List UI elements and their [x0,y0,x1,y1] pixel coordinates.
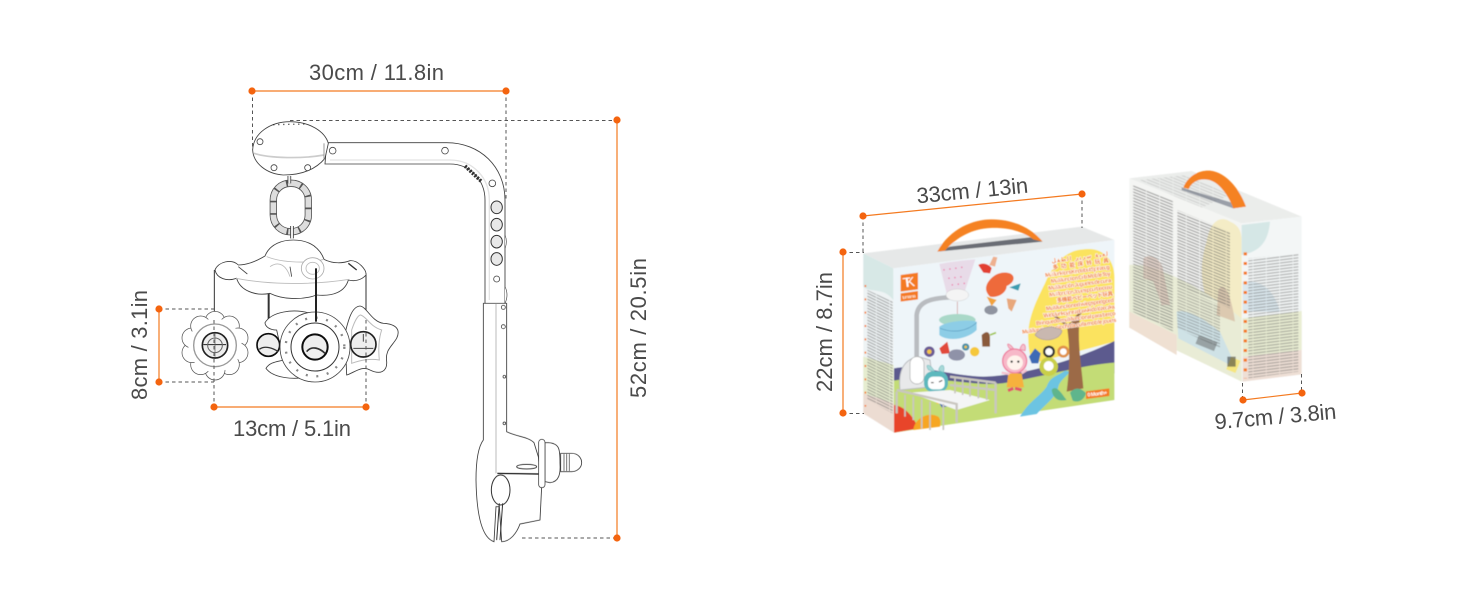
projected animals [978,257,1021,315]
front label text: 多功能床铃玩具 [1052,256,1110,271]
dimension: total height 52cm: 52cm / 20.5in [626,258,651,398]
box front view [863,219,1118,433]
front label text: Multifonction Jouets pour berceau [1049,285,1113,299]
back box narrow side [1242,217,1302,382]
hanging toys [924,332,996,361]
tree [1052,310,1086,402]
box back view [1129,171,1302,382]
mobile product line drawing [182,122,582,542]
front label text: 多機能ベビーベッド玩具 [1056,289,1114,304]
flower toy [182,311,248,380]
canopy [215,240,366,299]
age badge: 0 Month+ [1087,390,1108,399]
dimension: box height 22cm [812,248,864,417]
dimension: toy span 13cm: 13cm / 5.1in [233,416,351,441]
box left side [863,253,894,433]
round disc toy [280,268,350,382]
back box wide face [1129,178,1243,382]
arm and pole [325,143,507,304]
box top face [863,227,1114,268]
illustrated mobile [900,259,977,390]
front label text: Wielofunkcyjne zabawki do łóżeczka [1043,304,1116,320]
dimension: toy height 8cm [127,290,214,400]
star toy [345,306,398,375]
front label text: لعبة سرير الطفل [1051,251,1109,265]
front label text: Multifunctioneel wiegspeelgoed [1046,298,1115,313]
front label text: Multifunción Juguetes de cuna [1048,278,1113,292]
brand badge: tumama [902,293,916,300]
brand badge: TK [902,274,916,290]
moon and small ball toy [257,311,310,378]
dimension: box height 22cm: 22cm / 8.7in [812,272,837,392]
age badge [1086,388,1109,399]
back box top face [1129,171,1302,223]
strings [214,270,366,323]
front label text [1013,250,1118,336]
dimension: box length 33cm: 33cm / 13in [915,173,1029,208]
dimension: arm width 30cm [248,60,510,200]
chain link [273,176,308,238]
dimension: toy span 13cm [210,320,370,441]
dimension: box depth 9.7cm [1213,374,1337,434]
speaker hub [253,122,328,175]
back box handle [1183,171,1246,208]
front label text: Multifunction Crib Mobile Toy [1051,271,1112,285]
dimension: box depth 9.7cm: 9.7cm / 3.8in [1213,399,1337,434]
dimension: toy height 8cm: 8cm / 3.1in [127,290,152,400]
clamp [476,303,582,542]
box front illustration [893,240,1114,433]
front label text: Brinquedo multifuncional para berço [1036,311,1117,327]
brand badge [901,273,918,302]
dimension: box length 33cm [859,173,1086,254]
orange handle [937,219,1043,252]
dimension: total height 52cm [290,116,651,542]
dimension: arm width 30cm: 30cm / 11.8in [309,60,444,85]
front label text: Multifunktions Kinderbett Spielzeug [1045,265,1111,279]
front label text: Multifunzionale giochi da culla mobile jouets [1022,318,1117,336]
blue rabbit character and crib [897,365,996,430]
toys on tree branch [1029,327,1069,376]
rabbit girl character [1002,344,1027,391]
